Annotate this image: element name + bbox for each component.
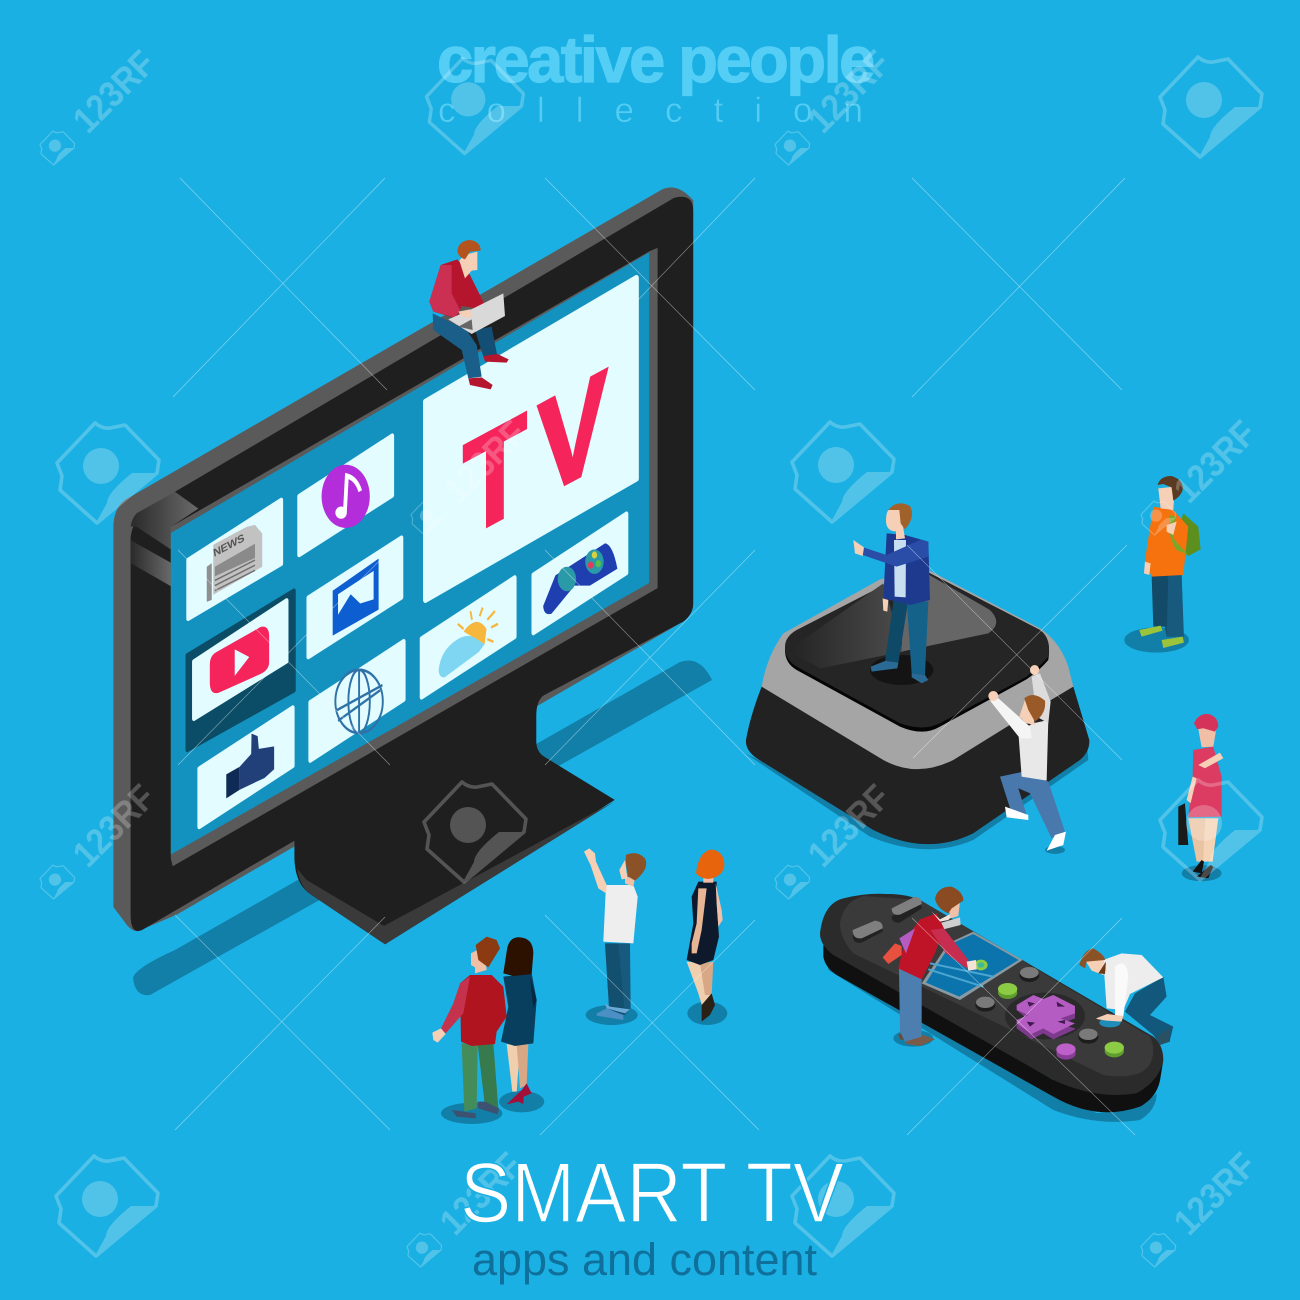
person: man climbing box: [988, 665, 1066, 854]
app tile: weather: [421, 577, 515, 697]
box body: [746, 687, 1089, 844]
person: couple from behind: [432, 937, 544, 1124]
remote touch screen: [922, 932, 1023, 1000]
remote shadow: [827, 960, 1157, 1122]
app tile: video player: [187, 591, 294, 750]
tv tile lettering: TV: [463, 334, 618, 568]
watermark: 123RF text: 123RF: [65, 776, 163, 875]
person: man with backpack: [1124, 476, 1201, 653]
person: man standing on box: [853, 503, 933, 685]
news label: NEWS: [212, 532, 246, 560]
brand heading: collection: [438, 91, 863, 130]
brand heading: creative people: [437, 23, 873, 96]
watermark: 123RF text: 123RF: [800, 776, 898, 875]
box silver band: [762, 570, 1073, 769]
box shadow: [745, 740, 1088, 849]
watermark: 123RF text: 123RF: [1166, 412, 1264, 511]
watermark: 123RF text: 123RF: [800, 42, 898, 141]
tv floor shadow: [133, 660, 712, 995]
app tile: news: [188, 500, 281, 619]
person: man in white shirt: [584, 848, 646, 1025]
remote d-pad: [1005, 993, 1085, 1039]
app tile: thumbs up: [199, 708, 293, 827]
app tile: globe: [310, 641, 404, 761]
woman in teal dress: [501, 937, 537, 1104]
set top box: [745, 476, 1223, 881]
people looking at tv: [584, 848, 727, 1025]
box top surface: [785, 572, 1049, 732]
smart tv monitor: [113, 187, 693, 944]
app tile: picture: [308, 538, 402, 657]
brand heading: [437, 23, 873, 130]
watermark: 123RF text: 123RF: [65, 42, 163, 141]
watermark: 123RF text: 123RF: [1166, 1144, 1264, 1243]
remote buttons: [853, 897, 1124, 1060]
person: man crouching with ball: [1079, 948, 1173, 1045]
remote body: [823, 945, 1163, 1112]
app tile: game controller: [533, 514, 627, 633]
man in red jumper: [432, 937, 507, 1118]
tv screen: [171, 248, 658, 866]
monitor casing: [113, 187, 693, 944]
main title: SMART TV: [460, 1146, 844, 1241]
person: woman in black dress: [687, 849, 727, 1025]
person: man in red blazer: [883, 887, 977, 1047]
subtitle: apps and content: [472, 1234, 817, 1285]
game remote control: [820, 887, 1173, 1122]
app tile: music: [299, 436, 392, 555]
app tile: tv: [425, 278, 637, 600]
watermark: 123RF text: 123RF: [432, 1144, 530, 1243]
person: woman in red dress: [1178, 714, 1223, 881]
watermark: 123RF text: 123RF: [436, 412, 534, 511]
person: man sitting with laptop: [429, 240, 509, 389]
